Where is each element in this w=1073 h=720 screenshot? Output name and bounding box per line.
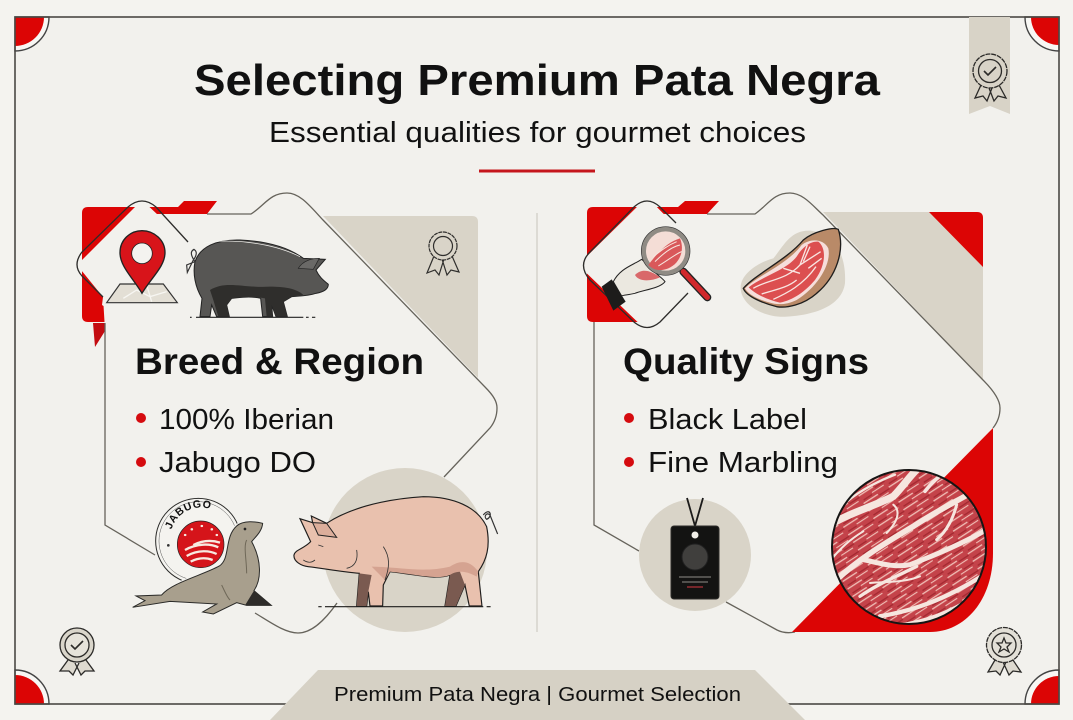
icon: map pin bbox=[107, 231, 177, 303]
bullet list: Fine Marbling bbox=[648, 447, 838, 479]
corner: top right bbox=[1025, 17, 1059, 51]
bullet list bbox=[624, 404, 838, 479]
icon: check medal on ribbon bbox=[973, 54, 1007, 101]
icon: star medal bottom right bbox=[986, 628, 1022, 675]
icon: cured ham slice bbox=[741, 229, 845, 317]
bullet list: Jabugo DO bbox=[159, 447, 316, 479]
subtitle: Essential qualities for gourmet choices bbox=[269, 117, 806, 149]
panel beige backdrop bbox=[823, 212, 983, 380]
icon tile bbox=[77, 200, 190, 330]
card outline bbox=[105, 193, 497, 633]
icon tile bbox=[578, 197, 712, 331]
heading: quality signs: Quality Signs bbox=[623, 341, 869, 382]
red top-right corner bbox=[929, 212, 983, 267]
footer banner bbox=[270, 670, 805, 720]
tile outline bbox=[584, 201, 688, 328]
red sweep behind marbling bbox=[792, 428, 993, 632]
icon: hand with magnifier bbox=[602, 227, 707, 311]
icon: Jabugo DO seal: JABUGO bbox=[165, 500, 211, 529]
corner: top left bbox=[15, 17, 49, 51]
panel beige backdrop bbox=[323, 216, 478, 378]
red corner tab bbox=[587, 201, 719, 322]
footer banner: Premium Pata Negra | Gourmet Selection bbox=[334, 684, 741, 706]
marbling close-up circle bbox=[830, 470, 987, 626]
title: Selecting Premium Pata Negra bbox=[194, 56, 881, 105]
corner: bottom right bbox=[1025, 670, 1059, 704]
icon: pink pig bbox=[294, 497, 498, 607]
bullet list bbox=[136, 404, 334, 479]
card outline bbox=[594, 193, 1000, 633]
centre divider bbox=[536, 213, 538, 632]
tile outline bbox=[77, 201, 188, 297]
bullet list: 100% Iberian bbox=[159, 404, 334, 436]
icon: black label tag bbox=[639, 498, 751, 611]
icon: sea lion bbox=[133, 522, 271, 614]
title accent rule bbox=[479, 170, 595, 172]
icon: Jabugo DO seal bbox=[155, 498, 238, 580]
panel: breed and region bbox=[76, 192, 498, 634]
bookmark ribbon with medal bbox=[969, 17, 1010, 114]
red corner tab bbox=[82, 201, 217, 322]
heading: breed and region: Breed & Region bbox=[135, 341, 424, 382]
red ribbon tail bbox=[93, 323, 105, 347]
icon: ribbon medal bbox=[427, 232, 459, 275]
corner: bottom left bbox=[15, 670, 49, 704]
icon: black pig bbox=[187, 240, 328, 317]
pale circle behind pink pig bbox=[323, 468, 487, 632]
icon: check medal bottom left bbox=[60, 628, 94, 675]
bullet list: Black Label bbox=[648, 404, 807, 436]
panel: quality signs bbox=[578, 193, 1000, 633]
